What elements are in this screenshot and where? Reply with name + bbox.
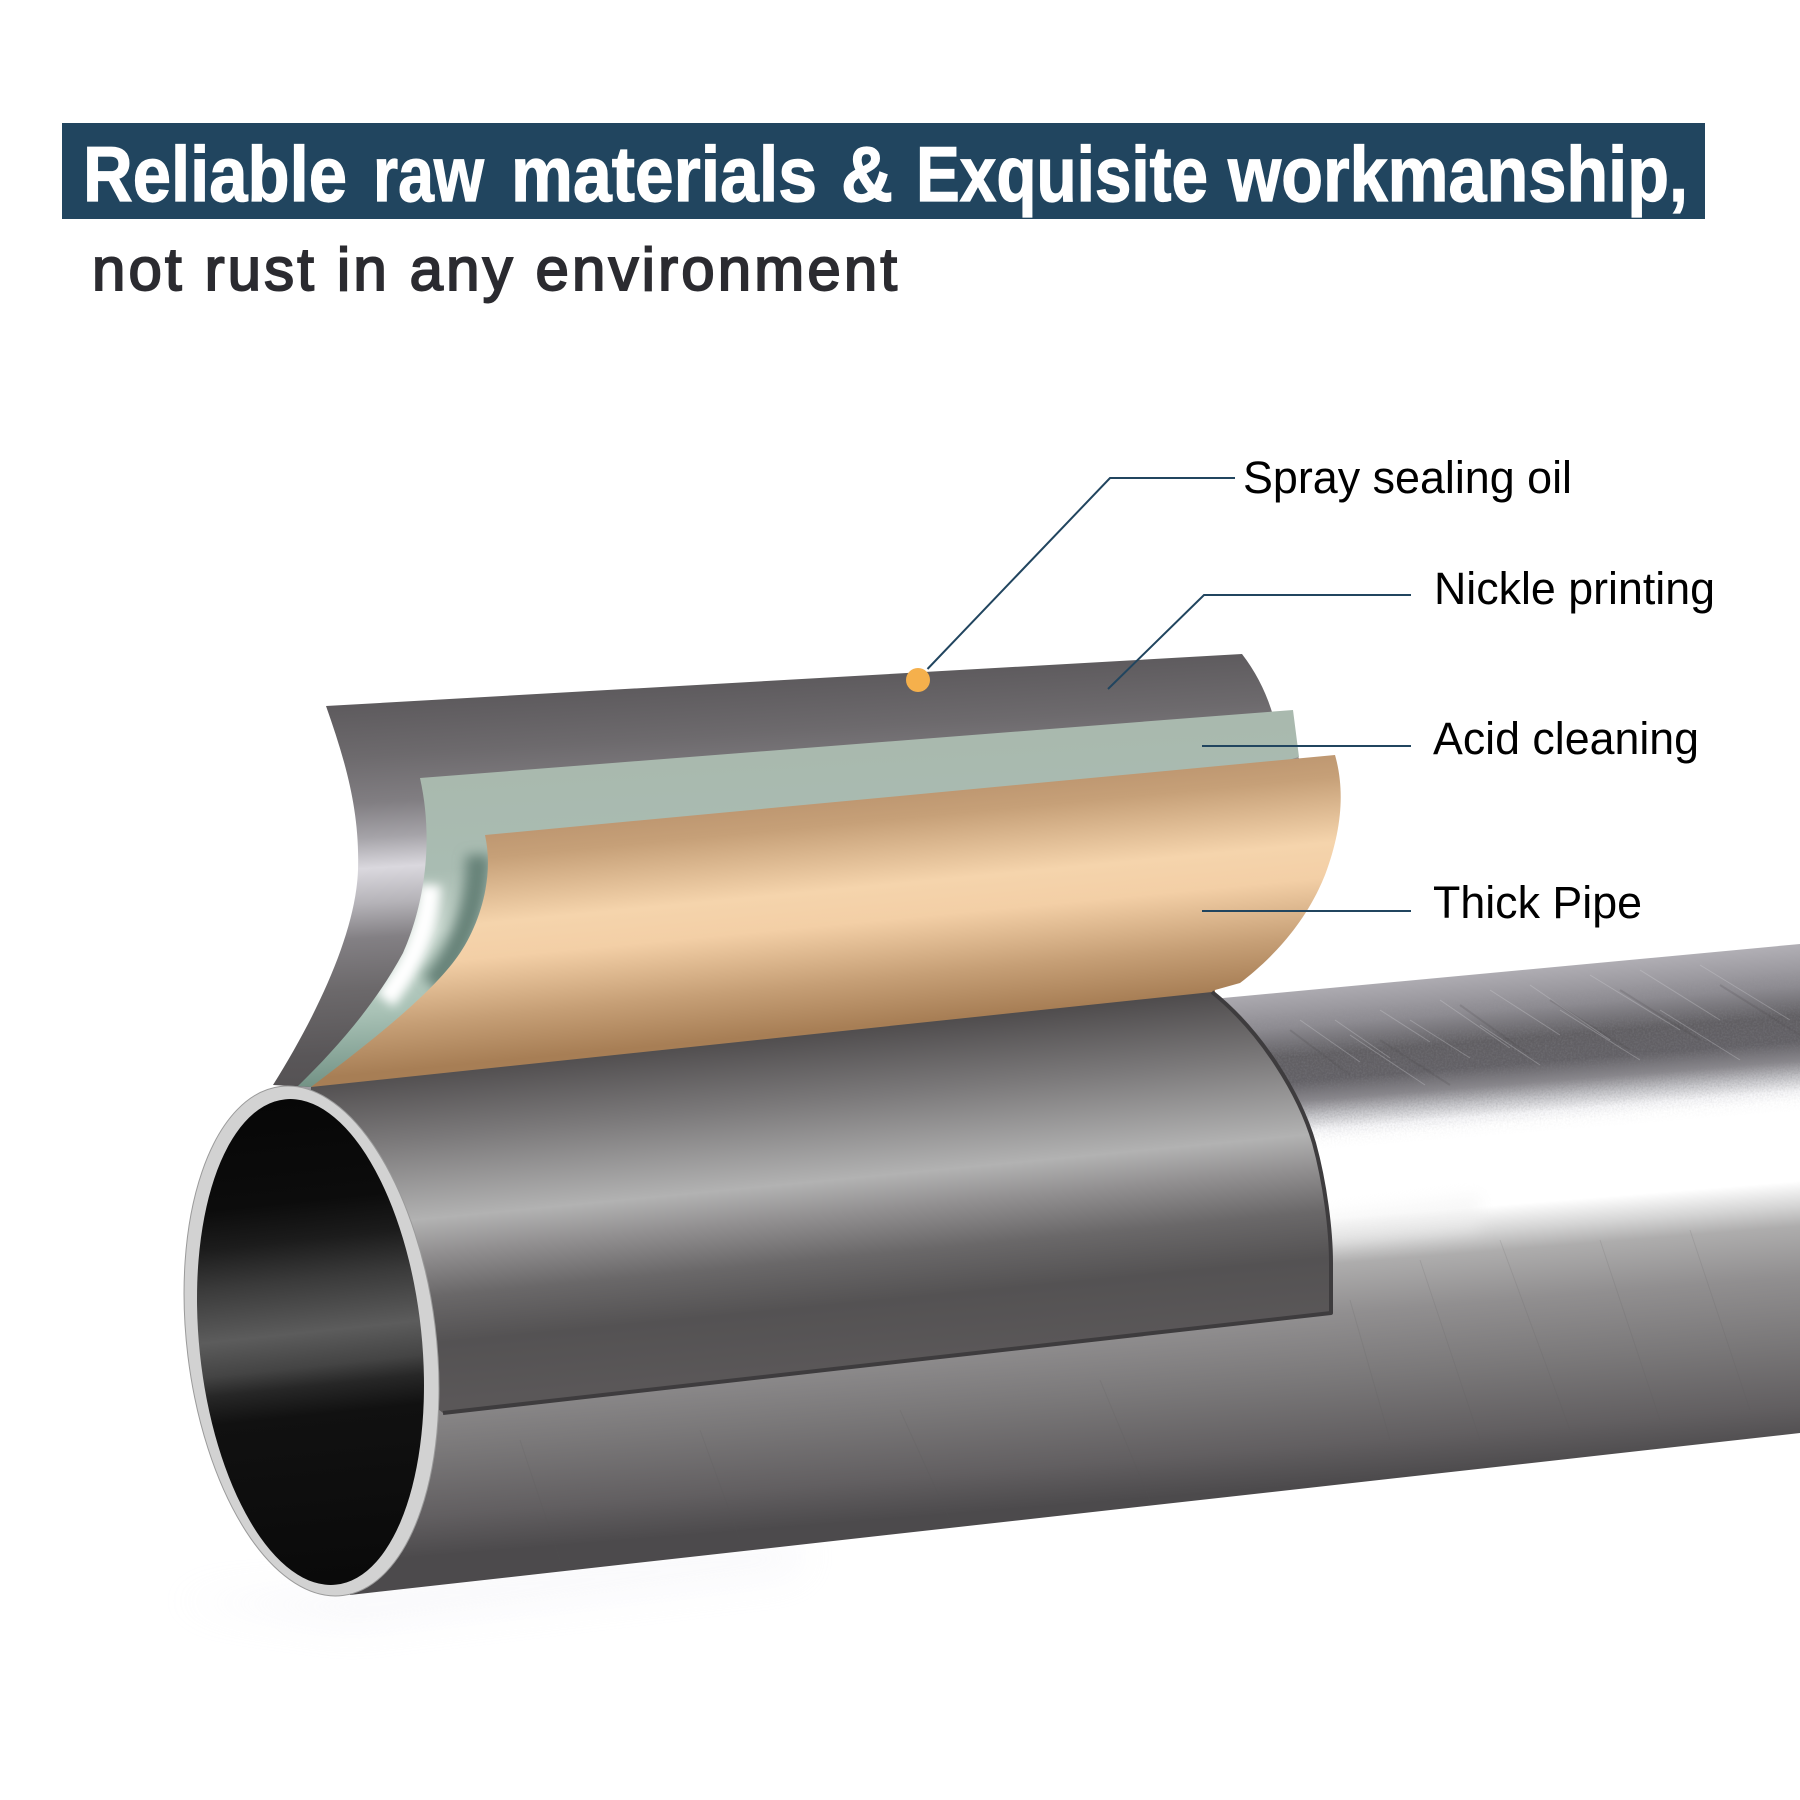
title banner: Exquisite [916, 130, 1208, 218]
title banner [62, 123, 1705, 219]
pipe opening [157, 1071, 466, 1611]
brushed scratches [520, 930, 1800, 1560]
callout: acid cleaning: Acid cleaning [1433, 713, 1699, 764]
layer: spray sealing oil sheet [273, 654, 1300, 1087]
callout: nickle printing [1108, 563, 1715, 689]
title banner: materials [511, 130, 817, 218]
callout: spray sealing oil [906, 452, 1572, 692]
title banner: raw [373, 130, 484, 218]
callout: nickle printing: Nickle printing [1434, 563, 1715, 614]
title banner: Reliable [83, 130, 347, 218]
pipe body [283, 930, 1800, 1595]
callout: spray sealing oil: Spray sealing oil [1243, 452, 1572, 503]
layer: nickel sheet [298, 710, 1299, 1087]
subtitle: not rust in any environment [92, 236, 897, 303]
layer: copper sheet [311, 755, 1341, 1092]
title banner: workmanship, [1227, 130, 1688, 218]
outer sleeve [300, 992, 1331, 1413]
callout: thick pipe: Thick Pipe [1433, 877, 1642, 928]
title banner: & [841, 130, 893, 218]
floor shadow [170, 1540, 800, 1625]
